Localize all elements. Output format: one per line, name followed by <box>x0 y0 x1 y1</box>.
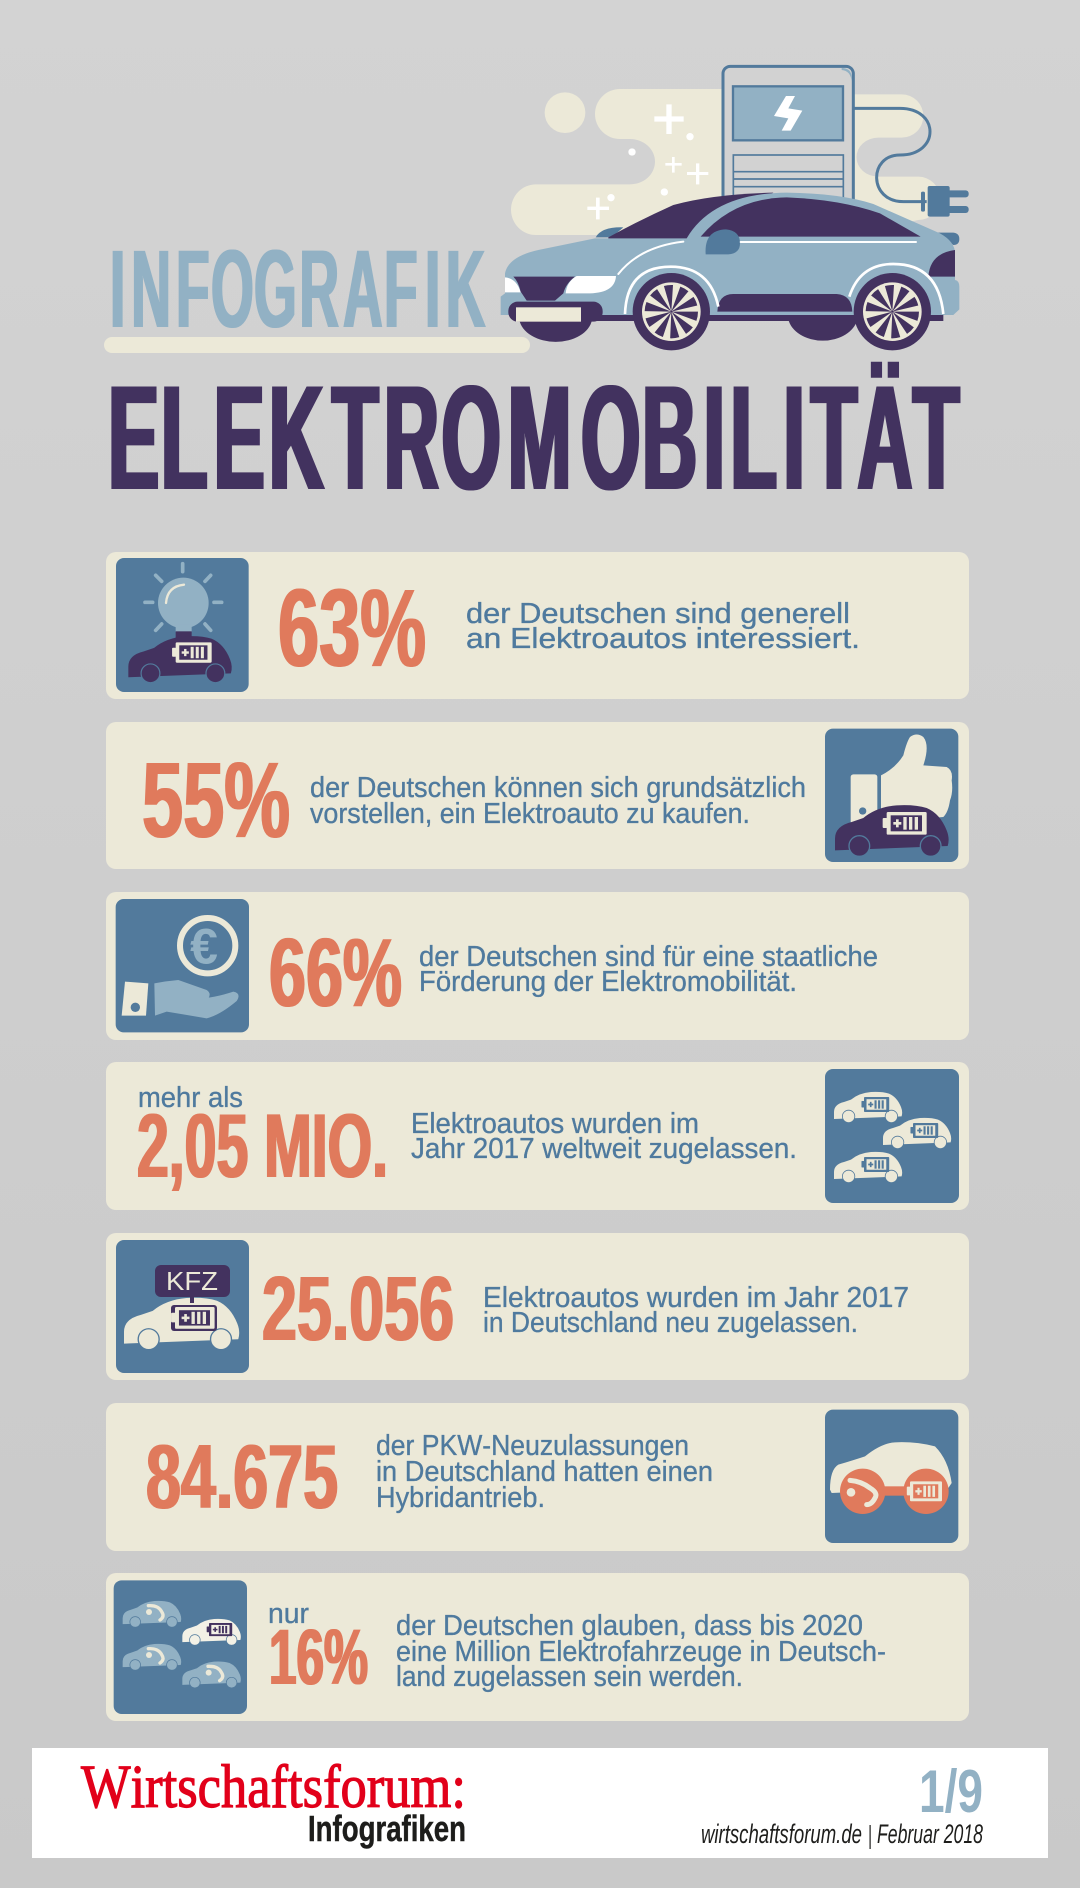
stat: 66%: 66% <box>269 918 402 1027</box>
stat: 55%: 55% <box>142 739 290 860</box>
panel: 66 percent for subsidies <box>106 892 969 1040</box>
description <box>376 1430 713 1514</box>
description: Hybridantrieb. <box>376 1482 545 1514</box>
description: der Deutschen sind für eine staatliche <box>419 941 878 973</box>
icon: hybrid car with fuel and battery <box>825 1410 958 1543</box>
description: Elektroautos wurden im <box>411 1108 699 1140</box>
description: land zugelassen sein werden. <box>396 1661 743 1693</box>
heading underline bar <box>104 337 530 353</box>
icon: three cars with batteries <box>825 1069 959 1203</box>
stat: 63%: 63% <box>278 567 426 690</box>
panel: 63 percent interested <box>106 552 969 699</box>
charging station <box>723 66 853 213</box>
stat: 25.056: 25.056 <box>262 1258 454 1360</box>
icon: KFZ sign and car <box>116 1240 249 1373</box>
source and date: wirtschaftsforum.de <box>701 1819 862 1849</box>
icon: combustion cars and one electric car <box>114 1580 247 1714</box>
stat: 2,05 MIO.: 2,05 MIO. <box>137 1096 388 1197</box>
source and date: Februar 2018 <box>877 1819 983 1849</box>
card background <box>106 1573 969 1721</box>
brand: Wirtschaftsforum: Wirtschaftsforum: <box>81 1754 466 1821</box>
lead-in: mehr als: mehr als <box>138 1082 243 1114</box>
stat: 16%: 16% <box>269 1612 368 1701</box>
cable and plug <box>854 108 969 217</box>
description <box>310 772 806 830</box>
icon: hand with euro coin: € <box>190 918 218 974</box>
description: Jahr 2017 weltweit zugelassen. <box>411 1133 797 1165</box>
description: der Deutschen glauben, dass bis 2020 <box>396 1610 863 1642</box>
description: der Deutschen können sich grundsätzlich <box>310 772 806 804</box>
heading: INFOGRAFIK: INFOGRAFIK <box>110 228 486 351</box>
panel: only 16 percent believe <box>106 1573 969 1721</box>
card background <box>106 552 969 699</box>
description <box>396 1610 886 1693</box>
description: in Deutschland neu zugelassen. <box>483 1307 858 1339</box>
subtitle: Infografiken: Infografiken <box>308 1808 466 1849</box>
stat: 84.675: 84.675 <box>146 1427 338 1528</box>
footer <box>32 1748 1048 1858</box>
card background <box>106 1062 969 1210</box>
description <box>483 1282 909 1339</box>
description <box>419 941 878 998</box>
cream background cloud <box>511 89 940 235</box>
card background <box>106 1233 969 1380</box>
description: eine Million Elektrofahrzeuge in Deutsch- <box>396 1636 886 1668</box>
icon: light bulb over car <box>116 558 249 692</box>
hero illustration: charging station and electric car <box>501 66 969 350</box>
footer background <box>32 1748 1048 1858</box>
description: der PKW-Neuzulassungen <box>376 1430 689 1462</box>
page number: 1/9 <box>919 1758 983 1825</box>
description <box>466 598 860 655</box>
panel: 25.056 new registrations <box>106 1233 969 1380</box>
card background <box>106 892 969 1040</box>
panel: 2.05 million worldwide <box>106 1062 969 1210</box>
icon: hand with euro coin <box>116 899 249 1032</box>
icon: KFZ sign and car: KFZ <box>166 1266 218 1296</box>
description: vorstellen, ein Elektroauto zu kaufen. <box>310 798 750 830</box>
description: an Elektroautos interessiert. <box>466 623 860 655</box>
icon: thumbs up with car <box>825 729 958 862</box>
description: Elektroautos wurden im Jahr 2017 <box>483 1282 909 1314</box>
description: Förderung der Elektromobilität. <box>419 966 797 998</box>
card background <box>106 1403 969 1551</box>
lead-in: nur: nur <box>268 1598 309 1630</box>
panel: 55 percent could imagine buying <box>106 722 969 869</box>
description <box>411 1108 797 1165</box>
car <box>501 193 959 350</box>
description: in Deutschland hatten einen <box>376 1456 713 1488</box>
sparkles <box>587 104 708 219</box>
card background <box>106 722 969 869</box>
description: der Deutschen sind generell <box>466 598 850 630</box>
panel: 84.675 hybrid registrations <box>106 1403 969 1551</box>
title: ELEKTROMOBILITÄT: ELEKTROMOBILITÄT <box>108 355 959 522</box>
